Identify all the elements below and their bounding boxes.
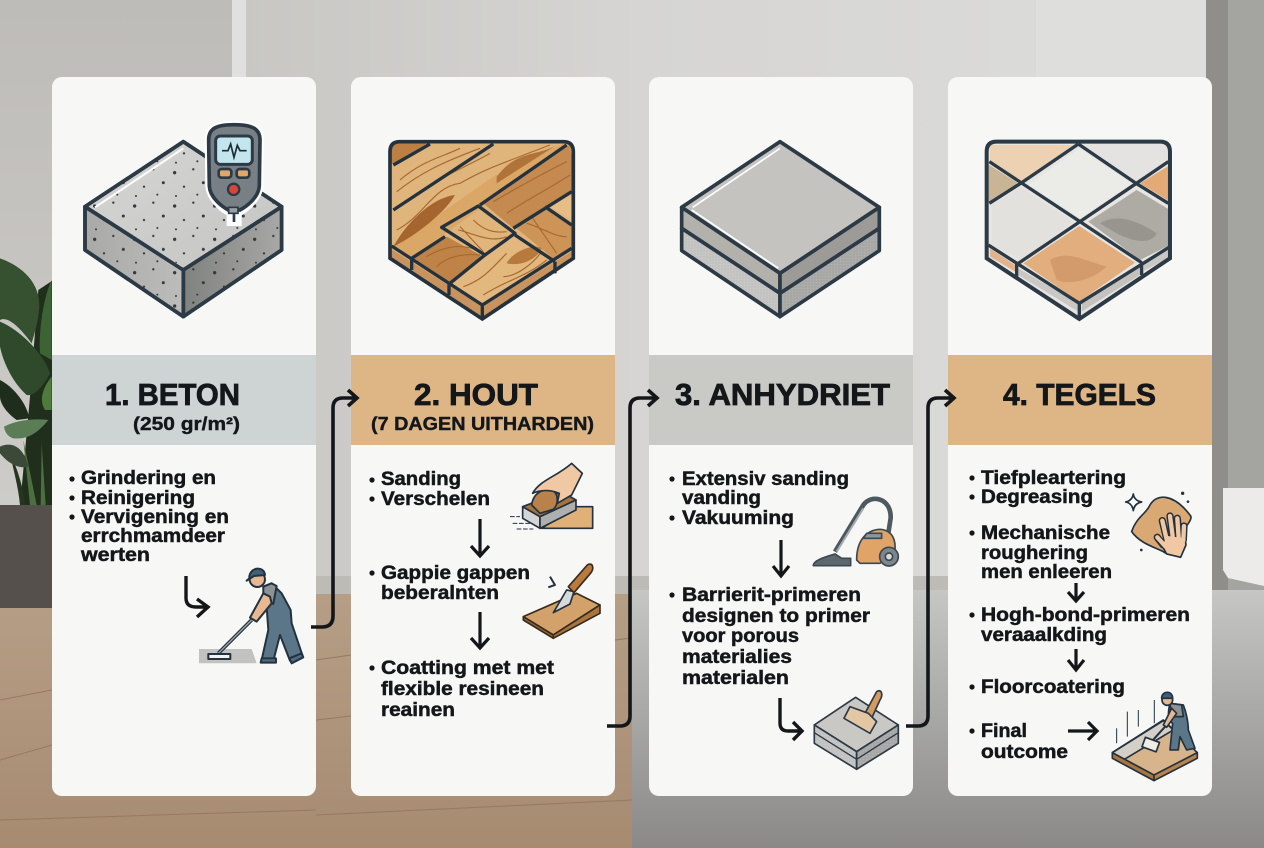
band: tegels heading [948,355,1212,445]
panel: tegels [906,77,1212,796]
text: tegels steps: roughering [981,542,1088,564]
arrow: tegels down 1 [1068,583,1084,601]
icon: cloth and hand [1126,492,1191,557]
cabinet [1223,488,1264,586]
text: beton steps: errchmamdeer [81,525,225,547]
icon: brush on slab [814,691,898,769]
text: anhydriet steps: vanding [682,487,761,509]
connector arrow: hout to anhydriet [607,390,657,726]
arrow: beton step to worker [186,576,208,617]
panel: hout [311,77,615,796]
icon: worker rolling coating [1112,692,1197,781]
panel: beton [52,77,316,796]
text: hout steps: Verschelen [381,488,490,510]
text: tegels steps: Hogh-bond-primeren [981,604,1190,626]
text: tegels steps: Floorcoatering [981,676,1125,698]
text: hout steps [369,468,555,721]
icon: tile floor [983,137,1177,323]
icon: moisture meter [205,121,264,226]
band: hout heading: 2. HOUT [414,377,538,412]
plant pot [0,505,52,608]
icon: chisel on wood [523,564,600,638]
text: tegels steps: Tiefpleartering [981,467,1126,489]
text: hout steps: flexible resineen [381,678,544,700]
text: anhydriet steps [669,468,870,689]
text: anhydriet steps: Vakuuming [682,507,794,529]
text: beton steps: Grindering en [81,467,216,489]
text: anhydriet steps: designen to primer [682,605,870,627]
arrow: hout down 1 [471,519,489,556]
band: anhydriet heading: 3. ANHYDRIET [675,377,890,412]
text: tegels steps [969,467,1190,763]
text: anhydriet steps: Extensiv sanding [682,468,849,490]
text: tegels steps: outcome [981,741,1068,763]
icon: wood planks [383,137,583,323]
icon: concrete block [85,142,282,317]
band: beton heading [52,355,316,445]
text: anhydriet steps: materialies [682,646,792,668]
band: hout heading: (7 DAGEN UITHARDEN) [371,414,594,434]
arrow: anhydriet down [773,540,789,576]
connector arrow: beton to hout [311,390,357,627]
text: tegels steps: Mechanische [981,522,1110,544]
text: tegels steps: veraaalkding [981,624,1107,646]
arrow: anhydriet to slab [780,698,802,740]
icon: sanding hand [510,463,593,529]
text: anhydriet steps: materialen [682,667,789,689]
icon: worker grinding [199,569,303,663]
text: hout steps: Coatting met met [381,657,555,679]
icon: vacuum cleaner [813,499,898,566]
text: hout steps: beberalnten [381,582,499,604]
text: anhydriet steps: Barrierit-primeren [682,584,861,606]
band: anhydriet heading [649,355,913,445]
text: anhydriet steps: voor porous [682,625,799,647]
text: beton steps: werten [80,544,150,566]
icon: anhydrite slab [682,142,879,317]
arrow: hout down 2 [471,612,489,648]
plant leaves [0,258,53,507]
text: beton steps: Reinigering [81,487,195,509]
text: hout steps: Sanding [381,468,461,490]
band: tegels heading: 4. TEGELS [1003,377,1156,412]
arrow: tegels down 2 [1068,649,1084,670]
text: beton steps: Vervigening en [81,506,229,528]
text: beton steps [69,467,229,566]
band: hout heading [351,355,615,445]
band: beton heading: (250 gr/m²) [133,414,240,434]
text: tegels steps: Degreasing [981,486,1093,508]
text: hout steps: Gappie gappen [381,562,530,584]
connector arrow: anhydriet to tegels [906,390,954,726]
panel: anhydriet [607,77,913,796]
text: tegels steps: men enleeren [981,561,1112,583]
text: tegels steps: Final [981,720,1027,742]
text: hout steps: reainen [381,699,455,721]
band: beton heading: 1. BETON [105,377,240,412]
arrow: tegels final outcome [1068,722,1097,740]
